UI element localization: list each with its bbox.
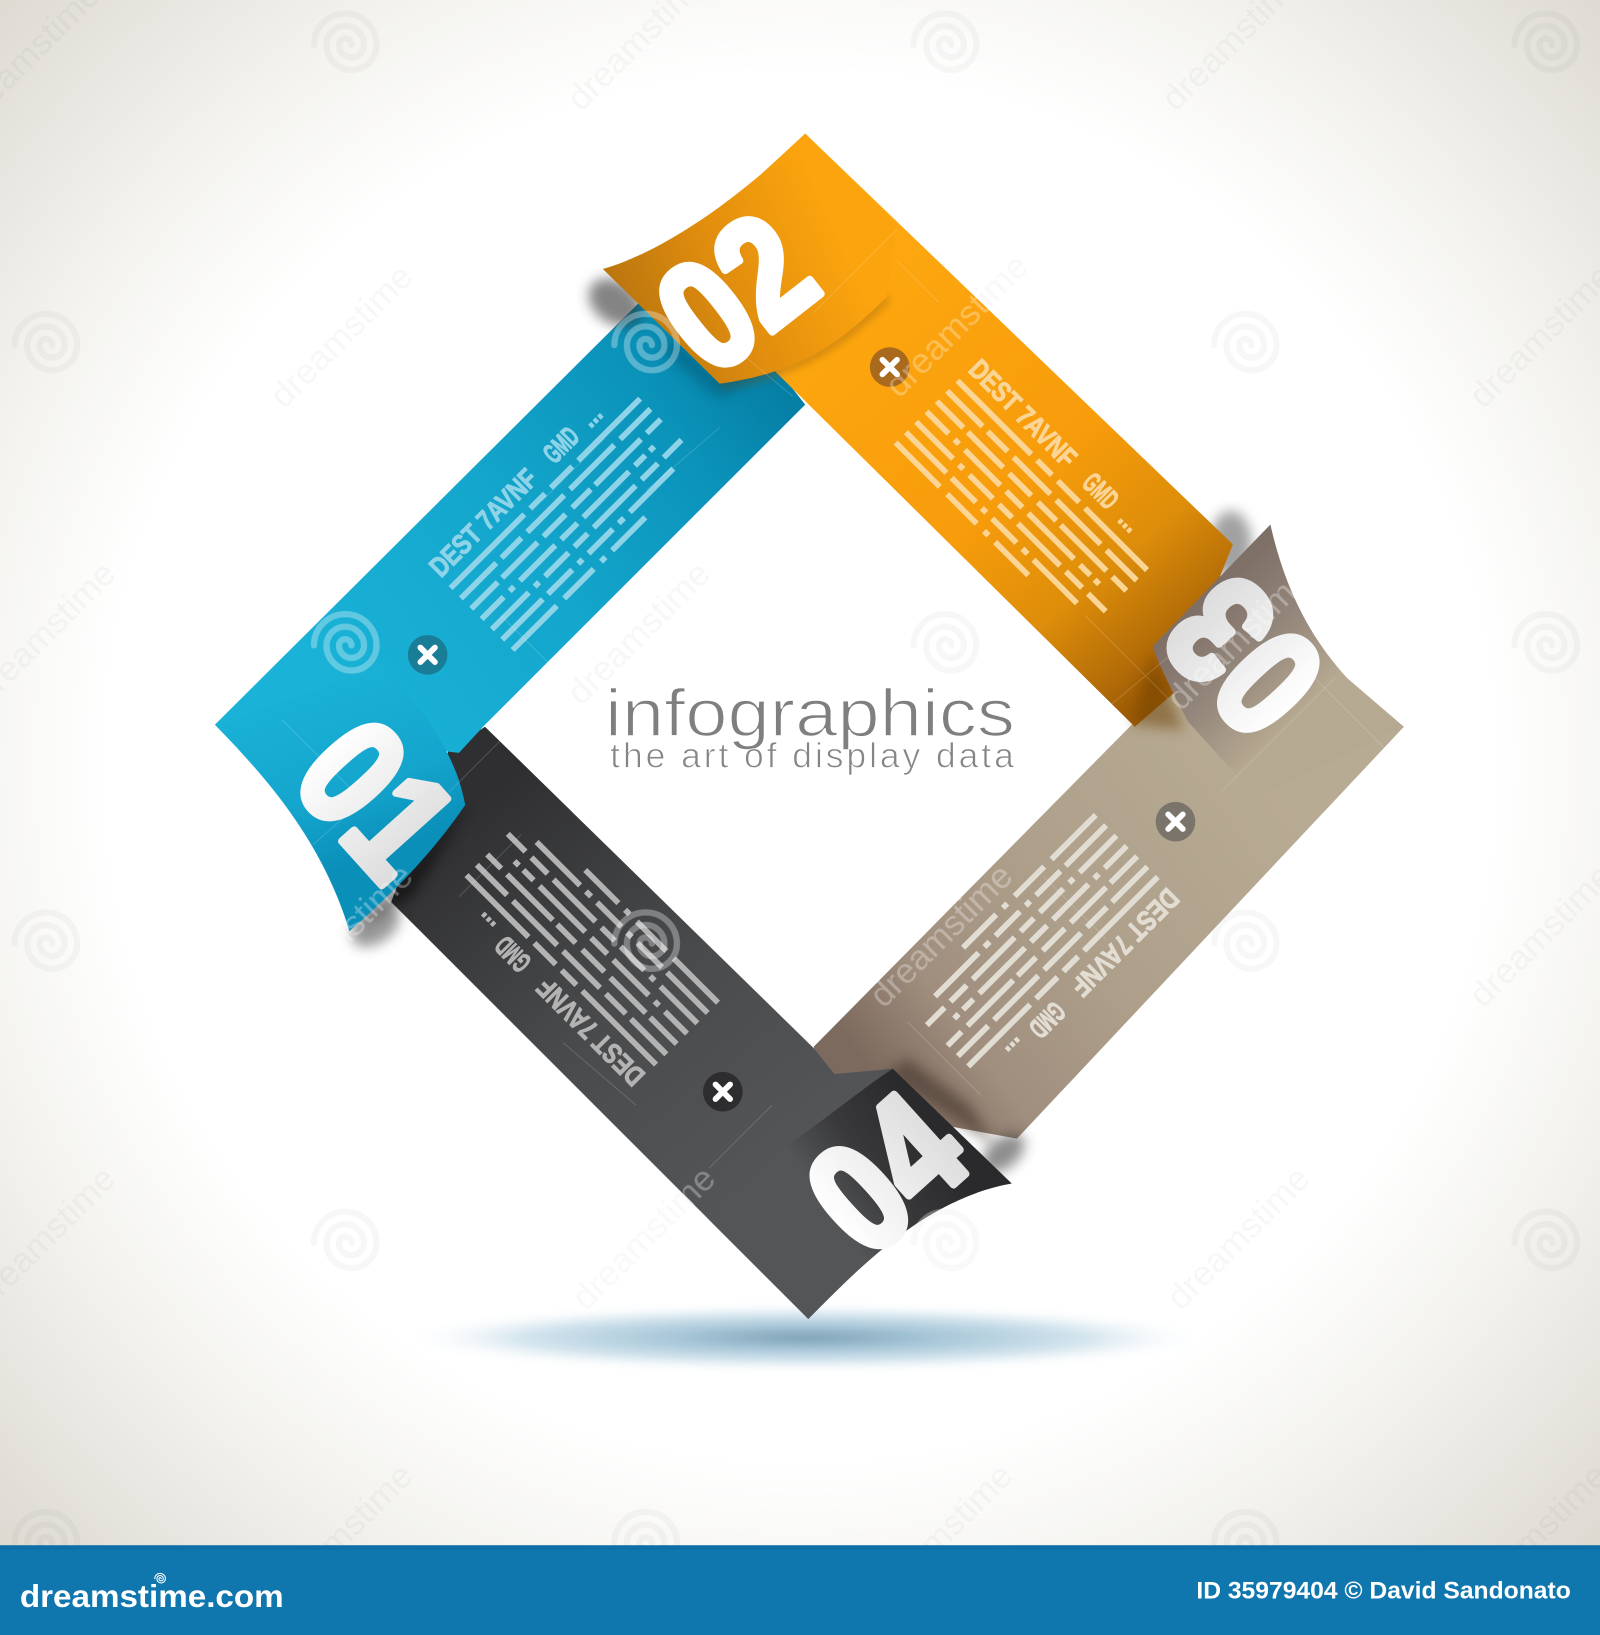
watermark text on background: dreamstime	[559, 553, 718, 712]
taupe ribbon text block: DEST 7AVNF	[1065, 882, 1185, 1002]
number 04: 04	[774, 1061, 997, 1286]
dark ribbon text block: GMD	[489, 930, 537, 978]
blue ribbon text block: DEST 7AVNF	[423, 463, 543, 583]
watermark overlays on ribbons: dreamstime	[877, 246, 1036, 405]
dark ribbon text block: DEST 7AVNF	[531, 972, 651, 1092]
watermark overlays on ribbons: dreamstime	[861, 856, 1020, 1015]
icon: plus button blue	[408, 635, 447, 675]
blue ribbon text block: GMD	[537, 421, 585, 469]
orange ribbon text block	[896, 353, 1174, 632]
watermark text on background: dreamstime	[261, 1455, 421, 1614]
dark ribbon text block	[439, 813, 718, 1092]
curled flap 02	[603, 133, 897, 384]
orange ribbon text block: ...	[1113, 503, 1148, 538]
watermark overlays on ribbons: dreamstime	[1158, 558, 1318, 718]
watermark text on background: dreamstime	[861, 1455, 1020, 1614]
title: infographics	[605, 677, 1015, 751]
number 02: 02	[625, 180, 845, 405]
panel: blue ribbon 01	[215, 295, 805, 753]
curled flap 03	[1153, 524, 1404, 798]
number 01: 01	[264, 688, 489, 910]
number 03: 03	[1131, 545, 1356, 768]
dark ribbon text block: ...	[466, 907, 501, 942]
watermark overlays on ribbons	[261, 229, 1387, 1317]
curled flap 01	[215, 664, 465, 931]
panel: taupe ribbon 03	[814, 652, 1404, 1139]
panel: dark ribbon 04	[391, 727, 918, 1319]
orange ribbon text block: GMD	[1076, 467, 1125, 515]
footer bar	[0, 1545, 1600, 1635]
watermark text on background: dreamstime	[261, 256, 421, 415]
watermark overlays on ribbons: dreamstime	[564, 1158, 723, 1317]
subtitle: the art of display data	[610, 735, 1014, 775]
floor shadow	[396, 1304, 1214, 1371]
curled flap 04	[709, 1069, 1012, 1319]
taupe ribbon text block	[906, 815, 1185, 1094]
watermark text on background: dreamstime	[564, 1158, 723, 1317]
panel: orange ribbon 02	[668, 133, 1233, 727]
icon: plus button dark	[703, 1072, 743, 1112]
footer logo spiral	[155, 1573, 165, 1583]
taupe ribbon text block: ...	[1000, 1032, 1035, 1067]
blue ribbon text block: ...	[573, 398, 608, 433]
orange ribbon text block: DEST 7AVNF	[963, 353, 1083, 473]
shadow under flap 03 on background	[1210, 511, 1252, 578]
icon: plus button taupe	[1156, 802, 1195, 841]
icon: plus button orange	[870, 347, 910, 387]
shadows cast by curled flaps	[344, 269, 1184, 1181]
watermark text on background: dreamstime	[1158, 1158, 1318, 1317]
watermark text on background: dreamstime	[877, 246, 1036, 405]
blue ribbon text block	[423, 371, 702, 650]
footer credit: ID 35979404 © David Sandonato	[1196, 1578, 1571, 1605]
taupe ribbon text block: GMD	[1023, 996, 1071, 1044]
watermark overlays on ribbons: dreamstime	[261, 856, 421, 1015]
footer logo text: dreamstime.com	[20, 1579, 284, 1614]
